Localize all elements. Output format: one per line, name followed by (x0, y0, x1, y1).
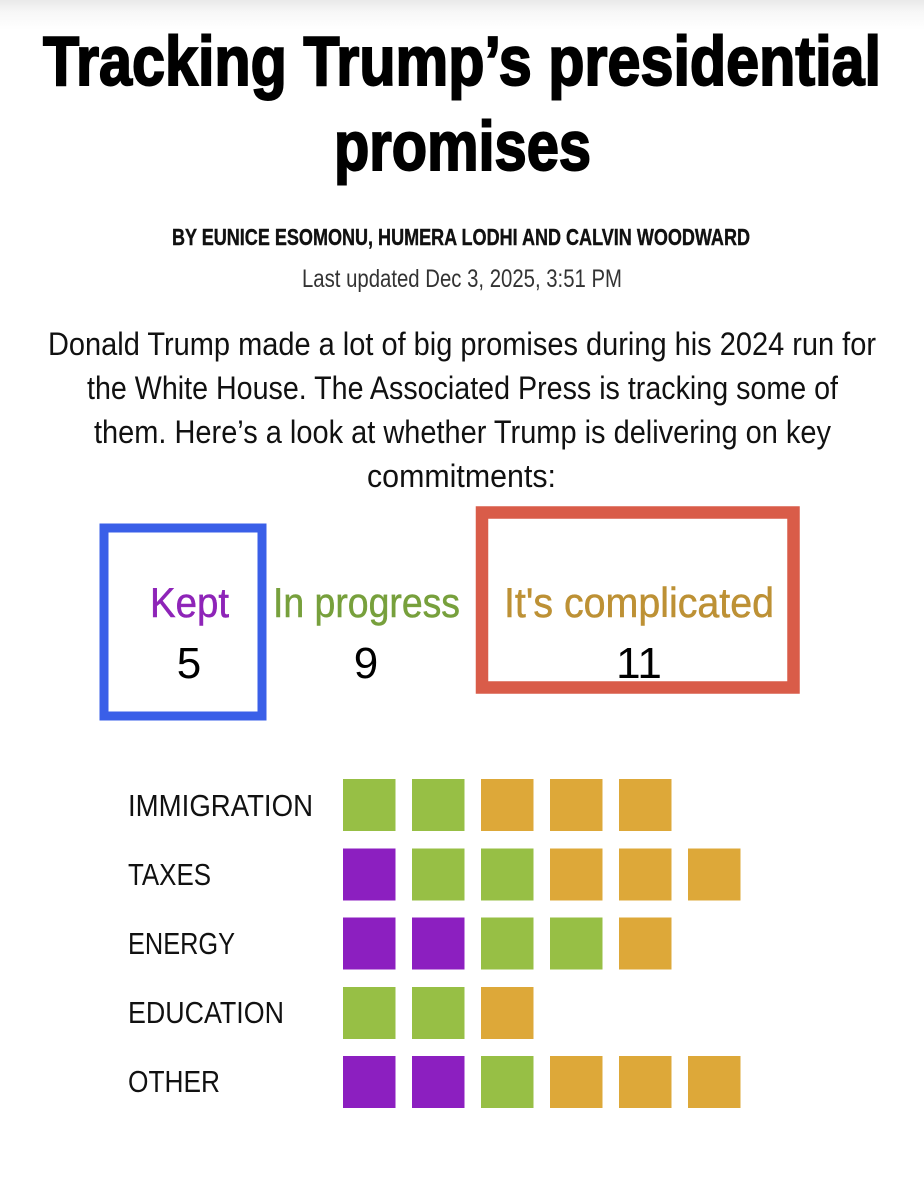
intro paragraph: them. Here’s a look at whether Trump is delivering on key (94, 414, 831, 450)
last updated date: Last updated Dec 3, 2025, 3:51 PM (302, 265, 622, 293)
row: immigration (128, 779, 672, 831)
tally: in progress: In progress (273, 579, 460, 626)
row: education (128, 987, 534, 1039)
row: taxes (128, 848, 740, 900)
promise grid (128, 779, 740, 1108)
byline: BY EUNICE ESOMONU, HUMERA LODHI AND CALVIN WOODWARD (172, 224, 750, 250)
title (43, 22, 881, 185)
intro paragraph: commitments: (367, 458, 556, 494)
annotation box: red around It's complicated (482, 512, 794, 688)
intro paragraph (48, 326, 876, 494)
tally: kept: 5 (177, 639, 201, 688)
intro paragraph: the White House. The Associated Press is tracking some of (87, 370, 838, 406)
tally: in progress: 9 (354, 639, 378, 688)
row: energy (128, 918, 672, 970)
tally: kept (150, 579, 229, 688)
tally: kept: Kept (150, 579, 229, 626)
tally: it's complicated: It's complicated (504, 579, 774, 626)
title: promises (334, 107, 591, 185)
annotation box: blue around Kept (104, 528, 262, 716)
row: other (128, 1056, 740, 1108)
tally: in progress (273, 579, 460, 688)
tally: it's complicated (504, 579, 774, 688)
tally: it's complicated: 11 (616, 639, 662, 688)
row: immigration: IMMIGRATION (128, 788, 313, 823)
row: energy: ENERGY (128, 926, 235, 961)
row: taxes: TAXES (128, 857, 211, 892)
row: other: OTHER (128, 1064, 220, 1099)
row: education: EDUCATION (128, 995, 284, 1030)
